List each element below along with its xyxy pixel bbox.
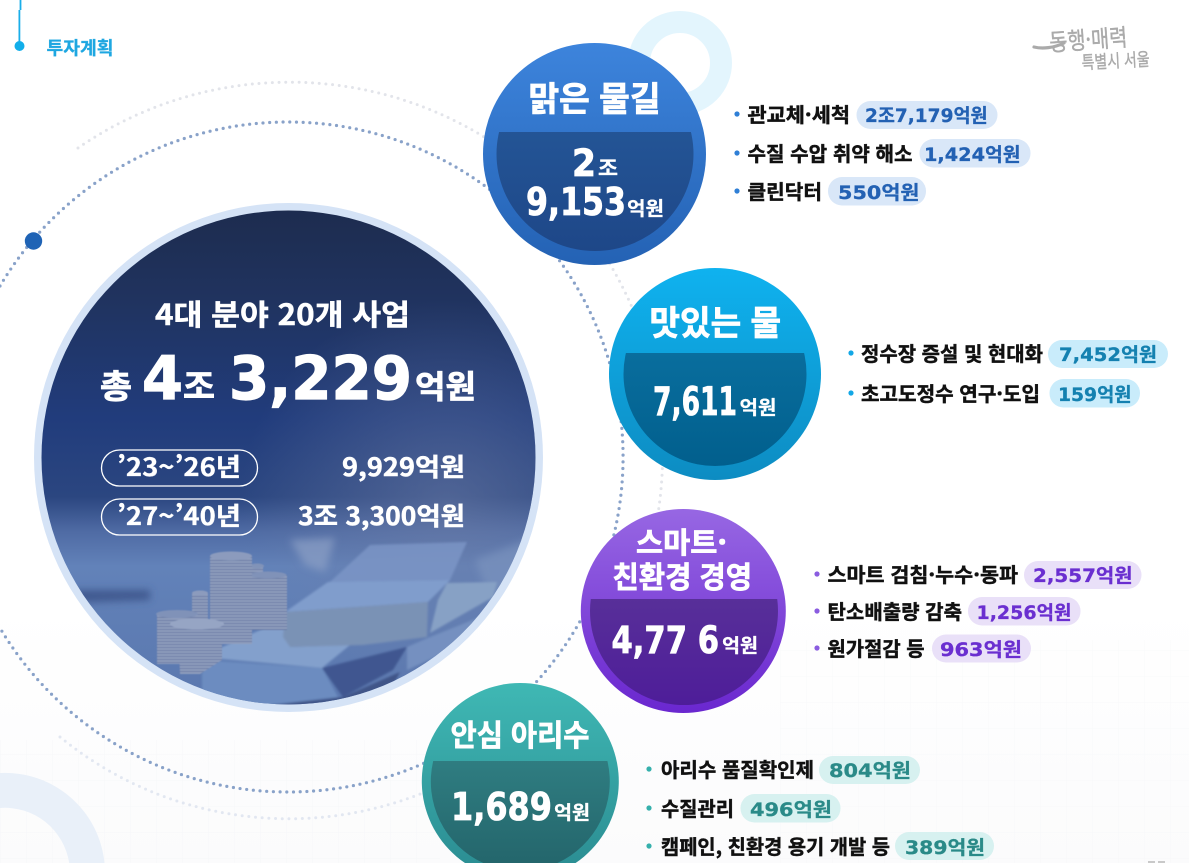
panel: clean waterway circle: 조 [598, 152, 618, 181]
panel: clean waterway circle [483, 43, 706, 265]
panel: smart eco management circle: 억원 [722, 631, 758, 658]
list: clean waterway items: 550억원 [838, 182, 920, 204]
list: safe arisu items [646, 754, 994, 860]
orbit marker dot [25, 232, 42, 250]
list: smart eco management items: 스마트 검침·누수·동파 [828, 559, 1018, 588]
title: four fields twenty projects: 4대 분야 20개 사업 [155, 292, 410, 334]
logo: Seoul slogan: 특별시 서울 [1081, 45, 1150, 75]
panel: smart eco management circle: 친환경 경영 [612, 553, 752, 597]
panel: safe arisu circle: 1,689 [451, 785, 552, 829]
total amount: 총 [100, 360, 132, 408]
decorative ring: top right of centre [639, 22, 721, 104]
period row 2027-2040: ’27~’40년 [117, 497, 241, 533]
list: smart eco management items [814, 559, 1142, 662]
panel: smart eco management circle [581, 509, 786, 713]
panel: smart eco management circle: 4,77 6 [612, 619, 719, 662]
list: smart eco management items: 1,256억원 [976, 602, 1072, 624]
list: tasty water items: 정수장 증설 및 현대화 [861, 338, 1043, 367]
decorative ring: bottom left [0, 773, 104, 863]
total amount: 조 [183, 360, 215, 408]
panel: safe arisu circle [422, 683, 619, 863]
list: smart eco management items: 963억원 [940, 639, 1022, 661]
panel: smart eco management circle: 스마트· [636, 520, 727, 562]
panel: safe arisu circle: 안심 아리수 [450, 711, 590, 755]
period row 2023-2026 [102, 448, 465, 486]
list: safe arisu items: 아리수 품질확인제 [661, 754, 814, 783]
panel: safe arisu circle: 억원 [554, 798, 590, 825]
section heading [14, 0, 114, 60]
panel: tasty water circle: 맛있는 물 [650, 296, 781, 345]
panel: clean waterway circle: 9,153 [526, 180, 626, 224]
list: smart eco management items: 탄소배출량 감축 [828, 596, 962, 625]
list: safe arisu items: 804억원 [829, 760, 911, 782]
list: safe arisu items: 389억원 [905, 837, 985, 859]
list: safe arisu items: 캠페인, 친환경 용기 개발 등 [661, 831, 890, 860]
total amount: 4 [142, 344, 183, 414]
ledger books [200, 542, 497, 710]
list: tasty water items: 7,452억원 [1059, 344, 1157, 366]
panel: clean waterway circle: 2 [572, 142, 596, 185]
list: tasty water items [848, 338, 1168, 408]
period row 2023-2026: 9,929억원 [342, 448, 465, 484]
list: safe arisu items: 496억원 [750, 799, 832, 821]
list: safe arisu items: 수질관리 [661, 793, 734, 822]
panel: tasty water circle: 7,611 [653, 380, 737, 425]
panel: clean waterway circle: 맑은 물길 [528, 72, 660, 121]
section heading: 투자계획 [46, 34, 114, 60]
panel: tasty water circle [609, 268, 821, 480]
total amount: 3,229 [229, 344, 412, 414]
logo: Seoul slogan: 동행·매력 [1048, 18, 1128, 58]
list: clean waterway items: 관교체·세척 [748, 99, 850, 128]
list: tasty water items: 159억원 [1058, 384, 1132, 406]
dotted orbit: outer faint [60, 82, 663, 819]
panel: tasty water circle: 억원 [740, 393, 776, 420]
list: clean waterway items: 클린닥터 [748, 176, 822, 205]
list: smart eco management items: 원가절감 등 [828, 633, 924, 662]
period row 2027-2040 [102, 497, 465, 535]
panel: clean waterway circle: 억원 [627, 194, 664, 221]
coin stacks [156, 552, 287, 674]
logo: Seoul slogan [1034, 18, 1150, 75]
total amount: 억원 [415, 362, 476, 408]
list: clean waterway items [734, 99, 1030, 206]
photo: coins and books [78, 536, 520, 704]
panel: total investment circle [34, 203, 543, 720]
total amount [100, 344, 476, 414]
list: clean waterway items: 2조7,179억원 [865, 105, 988, 127]
dotted orbit: main [0, 122, 623, 792]
list: tasty water items: 초고도정수 연구·도입 [861, 378, 1040, 407]
period row 2027-2040: 3조 3,300억원 [298, 497, 465, 533]
list: clean waterway items: 수질 수압 취약 해소 [748, 138, 912, 167]
list: clean waterway items: 1,424억원 [924, 144, 1020, 166]
period row 2023-2026: ’23~’26년 [117, 448, 241, 484]
list: smart eco management items: 2,557억원 [1033, 565, 1132, 587]
